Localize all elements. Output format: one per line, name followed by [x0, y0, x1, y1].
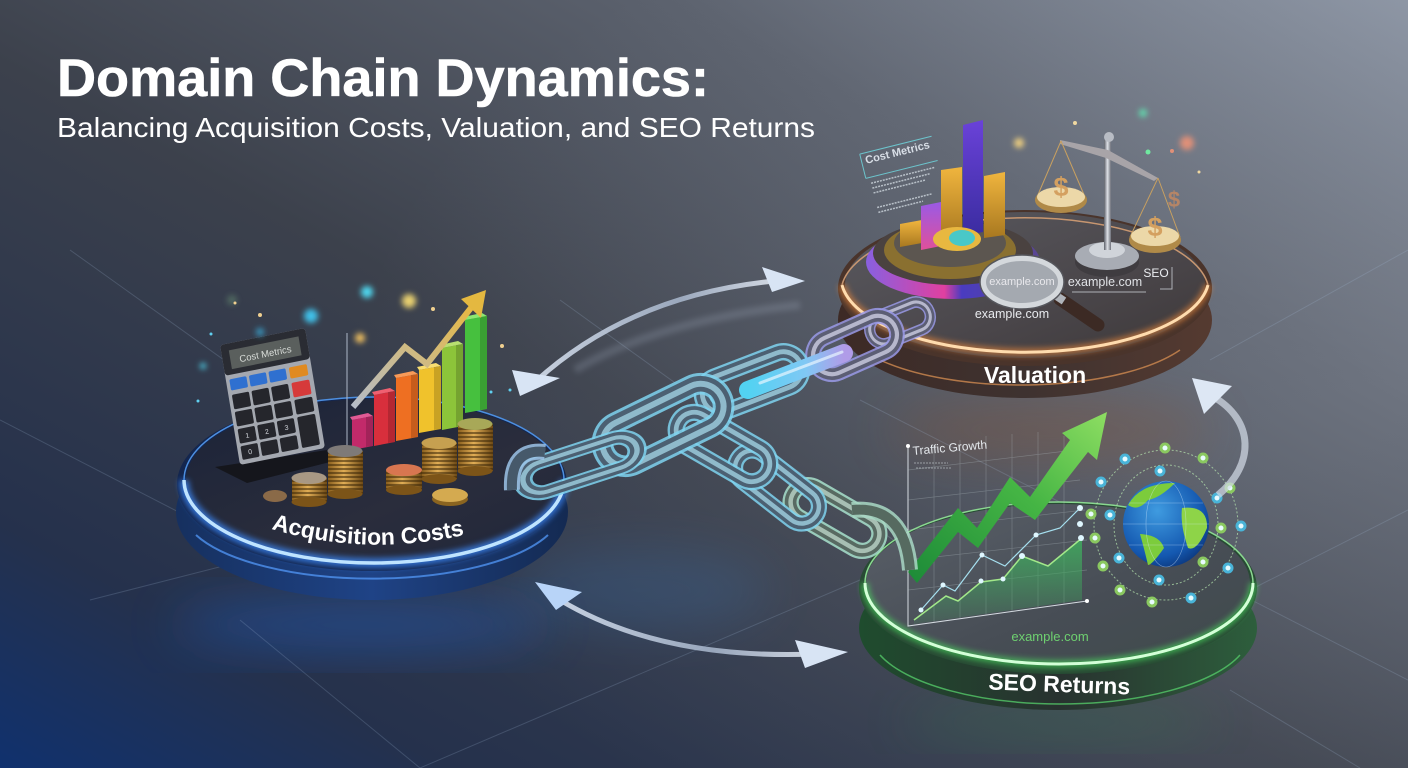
platform: SEO returns — [859, 412, 1257, 710]
platform base: SEO — [859, 502, 1257, 710]
label: SEO returns: SEO Returns — [988, 669, 1131, 699]
sparkles: valuation — [1014, 109, 1200, 174]
panel: cost metrics note — [860, 136, 946, 213]
chart: traffic growth — [906, 432, 1089, 626]
text: example.com domain: example.com — [1068, 275, 1142, 289]
title: Domain Chain Dynamics: — [57, 49, 709, 108]
chain segment: to SEO returns — [670, 406, 910, 570]
platform base: acquisition — [176, 397, 568, 600]
panel: cost metrics note: Cost Metrics — [864, 139, 931, 167]
icon: calculator: Cost Metrics — [239, 344, 293, 365]
icon: magnifying glass — [980, 255, 1098, 325]
label: valuation: Valuation — [984, 362, 1086, 388]
icon: calculator — [215, 328, 330, 483]
icon: globe network — [1087, 444, 1245, 606]
left pan — [1035, 172, 1087, 213]
right pan: $ — [1147, 212, 1163, 242]
arrow: acquisition to SEO loop — [535, 582, 848, 668]
icon: calculator: 3 — [284, 425, 289, 432]
arrow: cost trend — [353, 290, 486, 407]
platform base: valuation — [838, 210, 1212, 398]
text: example.com: example.com — [1011, 629, 1089, 644]
left pan: $ — [1053, 172, 1069, 202]
chain segment: to acquisition costs — [512, 376, 731, 498]
sparkles: acquisition — [196, 286, 512, 402]
chart: layered valuation bars — [866, 120, 1040, 299]
icon: magnifying glass: example.com — [989, 276, 1055, 288]
icon: calculator: 2 — [265, 428, 270, 436]
chain: glass links — [512, 298, 935, 570]
bar chart: rising costs — [347, 290, 487, 452]
icon: calculator: 1 — [245, 432, 250, 440]
label: acquisition costs: Acquisition Costs — [272, 515, 463, 545]
icon: balance scale — [1035, 132, 1181, 277]
arrow: green growth — [908, 412, 1107, 583]
subtitle: Balancing Acquisition Costs, Valuation, and SEO Returns — [57, 112, 815, 143]
chart title: Traffic Growth — [912, 438, 988, 458]
icon: balance scale: $ — [1168, 187, 1180, 212]
right pan — [1129, 212, 1181, 253]
icon: coin stacks — [263, 418, 493, 507]
platform: acquisition costs — [176, 290, 572, 600]
text: SEO: SEO — [1143, 266, 1169, 280]
chain segment: to valuation — [697, 298, 935, 418]
icon: calculator: 0 — [248, 449, 253, 456]
arrow: SEO to valuation loop — [1192, 378, 1245, 495]
text: example.com under magnifier: example.com — [975, 307, 1049, 321]
platform: valuation — [838, 120, 1212, 398]
arrow: valuation to acquisition loop — [512, 267, 805, 396]
